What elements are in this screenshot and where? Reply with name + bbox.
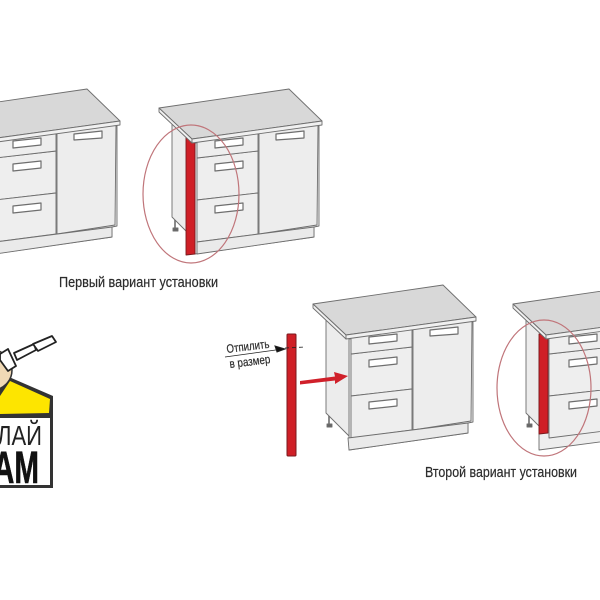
logo: yellow roof: [0, 381, 50, 414]
logo: screwdriver: [0, 336, 56, 371]
logo: head: [0, 350, 12, 390]
red arrow toward cabinet: [300, 372, 348, 384]
label: cut to size: в размер: [229, 352, 271, 371]
cabinet 4: post fitted, cropped at right edge: [513, 285, 600, 450]
red post: [186, 137, 195, 255]
logo: house: [0, 377, 53, 488]
cabinet 1: without side post, cropped at left edge: [0, 89, 120, 254]
logo: sign panel: [0, 418, 50, 485]
highlight ellipse: second option: [497, 320, 591, 456]
loose red post: [287, 334, 296, 456]
highlight ellipse: first option: [143, 125, 239, 263]
logo: [0, 336, 56, 493]
cabinet 2: with red post fitted under the worktop: [159, 89, 322, 255]
cabinet 3: before post is attached: [313, 285, 476, 450]
caption: first option: Первый вариант установки: [59, 274, 218, 291]
label: cut to size: [226, 337, 271, 371]
cut mark arrow: [225, 346, 306, 357]
label: cut to size: Отпилить: [226, 337, 270, 356]
